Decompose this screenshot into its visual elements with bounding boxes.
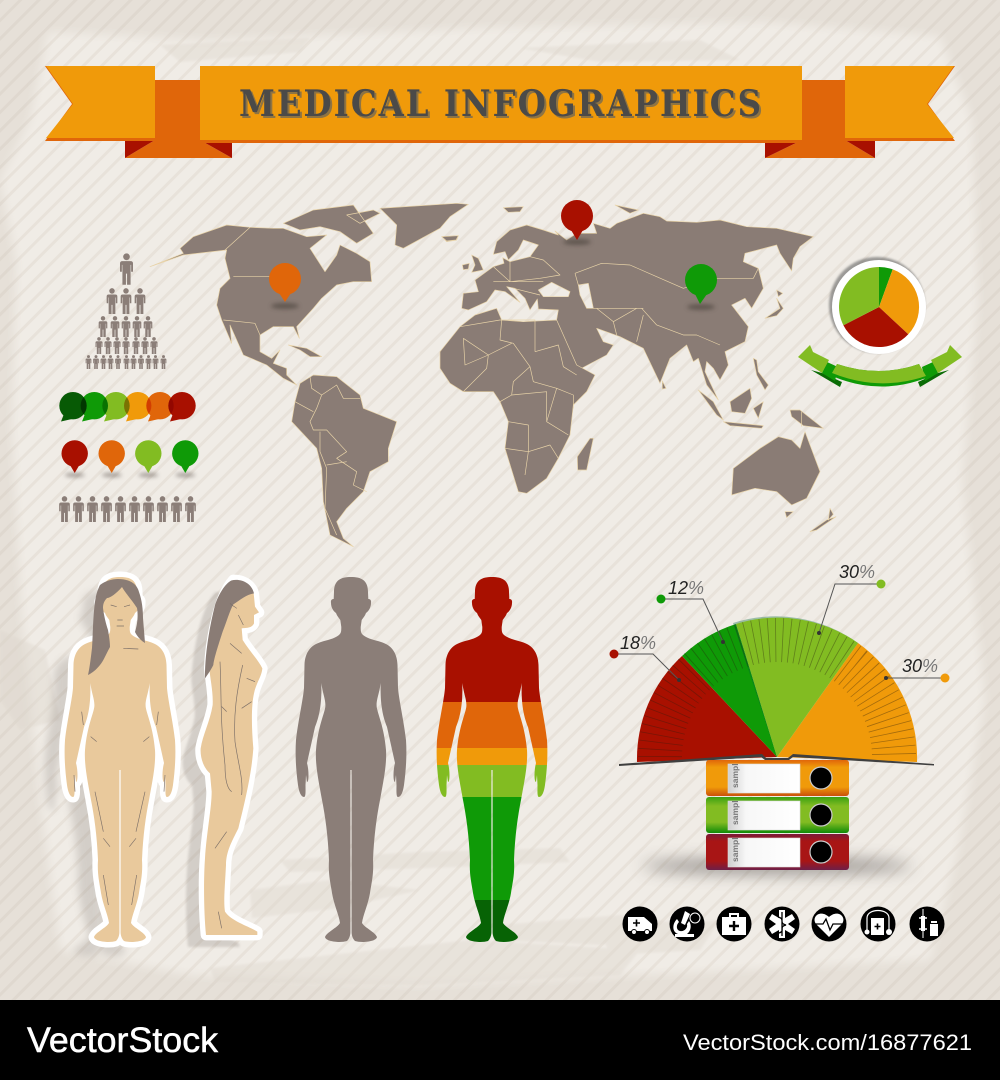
percent labels: 12% (668, 578, 704, 598)
wedge: amber (777, 643, 917, 762)
icon: syringe and vial (910, 906, 944, 942)
icon: ambulance (622, 906, 658, 942)
American borders (223, 227, 367, 535)
ribbon tail left (45, 66, 155, 141)
UK and Ireland (462, 255, 483, 272)
contours (215, 603, 255, 928)
figure: colour-banded silhouette (437, 577, 547, 942)
Arctic islands east (442, 205, 638, 241)
icon: medical star (764, 906, 800, 942)
pie badge (829, 257, 926, 354)
ribbon centre (200, 66, 802, 143)
Madagascar (577, 438, 593, 470)
map pin: red (561, 200, 593, 245)
title: MEDICAL INFOGRAPHICS (241, 85, 763, 127)
binder: orange: sampl (730, 763, 740, 788)
folders shadow (642, 858, 912, 874)
binder: green: sampl (730, 800, 740, 825)
Old World borders (460, 257, 802, 475)
leader dots (610, 580, 950, 682)
icon: heart pulse (812, 906, 846, 942)
Arctic islands (283, 205, 380, 243)
wedge: green (682, 624, 777, 757)
gauge chart (619, 616, 934, 766)
Iceland (442, 236, 458, 242)
people row (59, 496, 196, 522)
map: Americas (150, 203, 468, 547)
leader lines (614, 584, 945, 680)
title: MEDICAL INFOGRAPHICS (239, 83, 761, 125)
North America (150, 225, 372, 385)
percent labels: 30% (839, 562, 875, 582)
face and limb contours (74, 605, 165, 905)
watermark logo: VectorStock (27, 1021, 219, 1060)
map pin: orange (269, 263, 301, 309)
icon: first aid kit (716, 906, 752, 942)
icon: microscope (670, 906, 704, 942)
binder: red: sampl (730, 837, 740, 862)
percent labels: 18% (620, 633, 656, 653)
figure: side view (183, 580, 262, 947)
icon: stethoscope and drip (860, 906, 896, 942)
ribbon fold right (765, 80, 875, 158)
binder: orange (706, 760, 849, 796)
pie chart (839, 267, 919, 347)
map: Old World (440, 205, 836, 532)
pins row (61, 440, 198, 477)
Africa (440, 308, 595, 493)
Tasmania and New Zealand (785, 508, 836, 532)
binder: green (706, 797, 849, 833)
figure: grey silhouette (296, 577, 406, 942)
map pin: green (685, 264, 717, 310)
people pyramid (86, 253, 166, 369)
wedge: light green (733, 616, 858, 757)
watermark url: VectorStock.com/16877621 (683, 1030, 972, 1055)
figure: front view (45, 577, 175, 956)
Greenland (380, 203, 468, 248)
hair (88, 579, 145, 675)
Caribbean (288, 345, 322, 357)
speech bubbles row (59, 392, 196, 422)
binder: red (706, 834, 849, 870)
ribbon tail right (845, 66, 955, 141)
gauge base line (619, 754, 934, 766)
Indonesia and Philippines (698, 358, 823, 428)
Sri Lanka and Japan (662, 290, 783, 389)
percent labels: 30% (902, 656, 938, 676)
watermark bar (0, 1000, 1000, 1080)
Eurasia (462, 213, 813, 400)
ribbon fold left (125, 80, 232, 158)
Australia (732, 432, 820, 505)
world map (150, 203, 836, 547)
South America (292, 375, 397, 547)
percent labels (620, 562, 938, 676)
green ribbon (798, 345, 962, 387)
title ribbon (45, 66, 955, 158)
wedge: red (637, 656, 777, 762)
hair (205, 580, 254, 678)
gauge ticks (660, 640, 894, 757)
